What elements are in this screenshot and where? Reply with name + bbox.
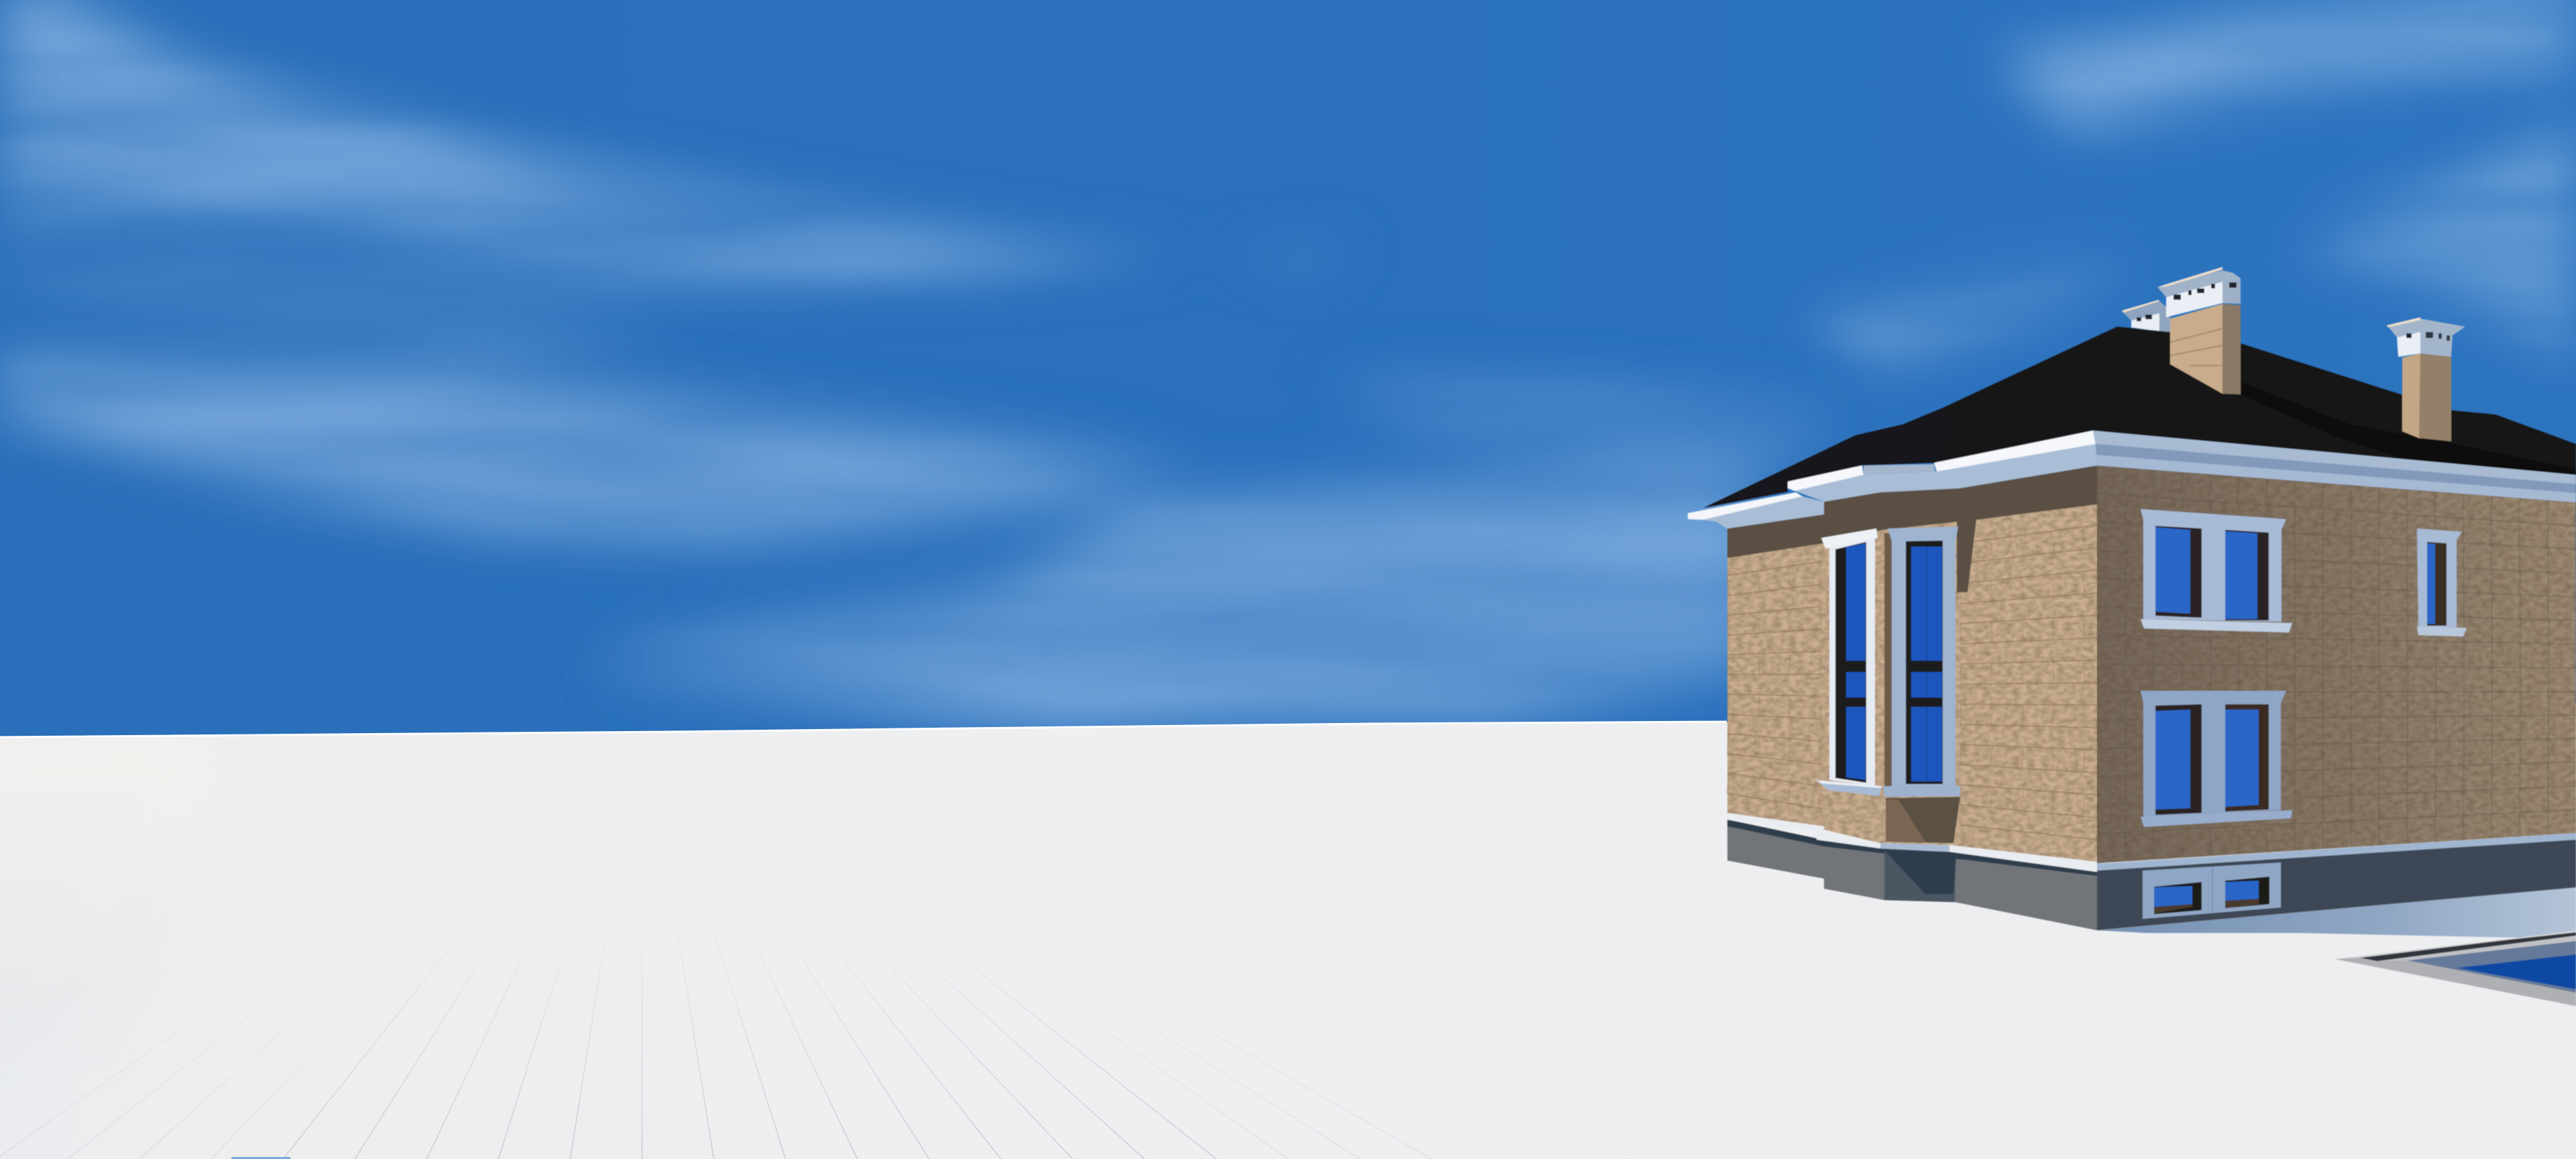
bay masonry strip xyxy=(1884,533,1892,786)
roof xyxy=(1704,327,2576,508)
sky background xyxy=(0,0,2576,744)
wall: eave shadow xyxy=(1727,465,2097,592)
eaves xyxy=(1688,431,2576,529)
shadow below bay sill xyxy=(1886,797,1960,843)
small blue mark at bottom edge xyxy=(231,1157,290,1159)
bay window: right xyxy=(1883,527,1960,797)
chimney: main xyxy=(2157,267,2241,394)
window: upper single xyxy=(2417,529,2467,637)
pool inner wall xyxy=(2408,941,2576,993)
foundation: left side xyxy=(1727,820,2097,930)
foundation: plinth shadow xyxy=(1727,820,2097,876)
eave: left white strip xyxy=(1688,492,1803,520)
roof left facet xyxy=(1704,408,1955,508)
chimney: right xyxy=(2387,317,2465,441)
pool water xyxy=(2457,954,2576,989)
house shadow on ground xyxy=(2097,887,2576,938)
wall: shaded brick joints xyxy=(2097,480,2576,848)
roof crease shadow xyxy=(2241,382,2576,475)
ground soft light patch xyxy=(0,724,215,1087)
pool rim top edge xyxy=(2377,936,2576,961)
horizon highlight xyxy=(0,722,1727,737)
deck plank lines: central xyxy=(283,838,1216,1159)
foundation: right side xyxy=(2097,838,2576,930)
wall: shaded brick courses xyxy=(2097,494,2576,834)
eave: bay fascia xyxy=(1794,444,2097,502)
swimming pool xyxy=(2335,931,2576,1006)
wall: sunlit side xyxy=(1727,465,2097,862)
pool groove xyxy=(2360,932,2576,961)
eave: bay white strips xyxy=(1788,465,1864,491)
deck plank lines: outer faint xyxy=(0,838,1432,1159)
clouds xyxy=(0,0,2576,728)
eave: right bands xyxy=(2093,431,2576,484)
foundation: bay pier xyxy=(1884,850,1956,902)
cloud haze base xyxy=(0,362,1825,721)
plinth strips xyxy=(1727,813,2576,872)
wall: sunlit brick courses xyxy=(1727,525,2097,840)
bay window: left xyxy=(1816,529,1882,796)
wall: shaded side xyxy=(2097,465,2576,863)
pool stone rim xyxy=(2335,931,2576,1006)
window: lower double xyxy=(2141,691,2292,827)
window: basement xyxy=(2143,863,2281,919)
ground plane xyxy=(0,704,2576,1159)
eave: left fascia xyxy=(1703,496,1824,529)
window: upper double xyxy=(2141,509,2292,632)
wall: sunlit brick joints xyxy=(1727,537,2097,806)
house xyxy=(1688,267,2576,930)
chimney: back small xyxy=(2122,300,2170,333)
